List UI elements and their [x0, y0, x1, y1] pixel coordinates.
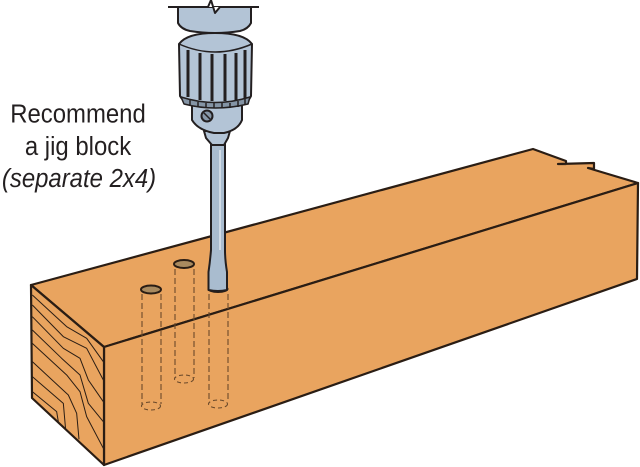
drill bit — [208, 143, 227, 291]
beam end grain — [31, 285, 104, 465]
label: recommend a jig block: (separate 2x4) — [2, 164, 156, 193]
wood grain lines — [32, 295, 103, 448]
label: recommend a jig block: a jig block — [25, 132, 132, 161]
holes — [141, 260, 228, 410]
beam top face — [31, 149, 638, 347]
label: recommend a jig block — [2, 100, 156, 193]
wood beam — [31, 149, 638, 465]
beam side face — [104, 183, 638, 465]
hole 1 (left) — [141, 286, 161, 410]
bit collar — [204, 131, 230, 145]
drill housing — [168, 0, 259, 33]
hole 2 (middle) — [174, 260, 194, 383]
knurled chuck sleeve — [179, 33, 252, 108]
drill — [168, 0, 259, 291]
hole 3 (with bit) — [208, 285, 228, 408]
label: recommend a jig block: Recommend — [10, 100, 146, 129]
chuck nose — [192, 103, 242, 133]
